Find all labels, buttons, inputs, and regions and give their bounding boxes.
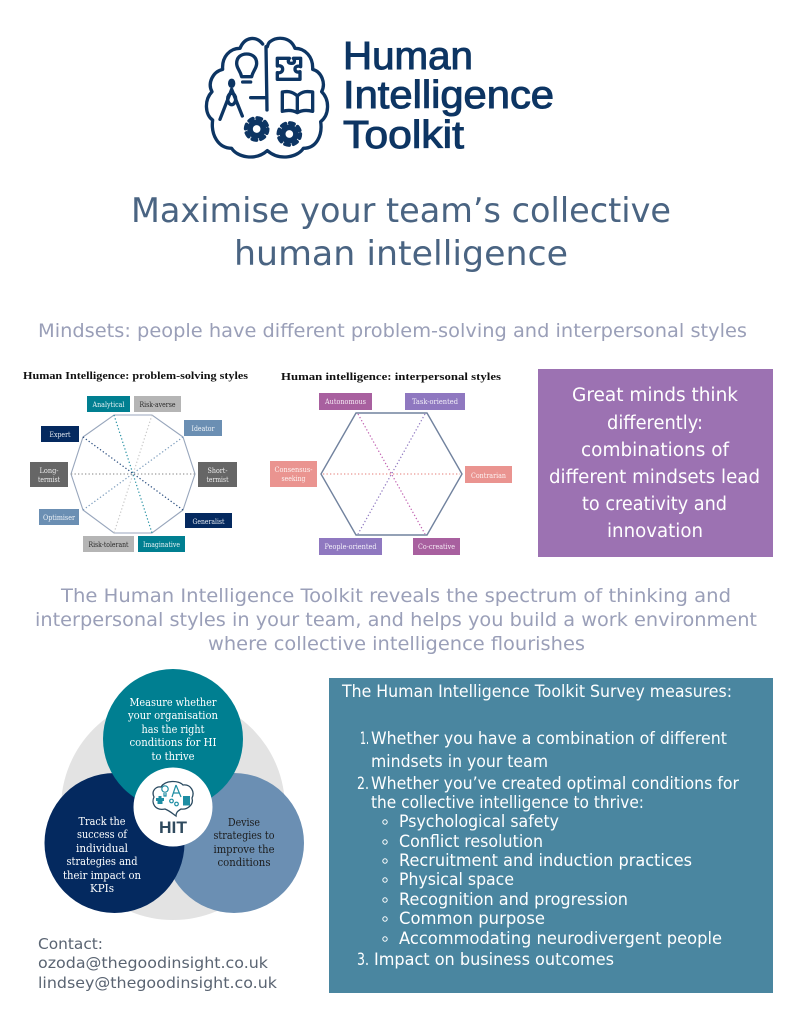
circle: devise strategies — [164, 773, 304, 913]
logo wordmark: Intelligence — [343, 74, 554, 117]
callout: great minds think differently: Great minds think — [572, 385, 738, 406]
label: Short-termist — [198, 462, 237, 487]
label: Risk-tolerant — [83, 536, 134, 552]
label: Consensus-seeking — [270, 461, 317, 487]
numbered list: survey items: the collective intelligence to thrive: — [371, 793, 644, 812]
logo wordmark — [343, 35, 554, 157]
title: Maximise your team’s collective — [131, 191, 671, 231]
numbered list: survey items: 1. — [360, 729, 369, 748]
label: Ideator — [184, 420, 222, 436]
contact details: lindsey@thegoodinsight.co.uk — [38, 974, 277, 992]
label: Autonomous — [319, 393, 372, 410]
panel heading: The Human Intelligence Toolkit Survey measures: — [341, 682, 732, 701]
numbered list: survey items: 2. — [357, 774, 369, 793]
circle: measure conditions: your organisation — [127, 709, 218, 722]
contact details: ozoda@thegoodinsight.co.uk — [38, 954, 268, 972]
label: Analytical — [87, 396, 130, 412]
logo: Human Intelligence Toolkit — [206, 35, 554, 157]
callout: great minds think differently: innovation — [607, 521, 703, 542]
numbered list: survey items — [357, 729, 739, 969]
label: Consensus-seeking: Consensus- — [274, 466, 313, 474]
label: Long-termist — [30, 462, 68, 487]
HIT centre badge: HIT — [159, 818, 188, 837]
label: Autonomous: Autonomous — [324, 398, 366, 406]
label: Co-creative: Co-creative — [418, 543, 455, 551]
circle: track success: success of — [77, 828, 128, 841]
numbered list: survey items: Recruitment and induction practices — [399, 851, 692, 870]
circle: devise strategies: improve the — [214, 843, 274, 856]
numbered list: survey items: Psychological safety — [399, 812, 559, 831]
contact details — [38, 935, 277, 992]
circle: track success: their impact on — [63, 869, 141, 882]
label: Risk-averse — [134, 396, 181, 412]
circle: track success: KPIs — [90, 882, 114, 895]
contact details: Contact: — [38, 935, 103, 953]
callout: great minds think differently — [538, 369, 773, 557]
numbered list: survey items: Physical space — [399, 870, 514, 889]
numbered list: survey items: Impact on business outcomes — [374, 950, 614, 969]
label: People-oriented — [319, 538, 382, 555]
chart: interpersonal styles hexagon — [270, 371, 512, 555]
title: human intelligence — [234, 234, 568, 274]
label: Optimiser: Optimiser — [43, 514, 76, 522]
label: Generalist: Generalist — [192, 518, 225, 526]
label: Short-termist: termist — [206, 476, 229, 484]
circle: measure conditions — [103, 669, 243, 809]
circle: measure conditions: to thrive — [152, 750, 194, 763]
subheading: mindsets: Mindsets: people have different problem-solving and interpersonal styles — [38, 320, 747, 342]
HIT centre badge — [134, 768, 212, 846]
numbered list: survey items: Accommodating neurodivergent people — [399, 929, 722, 948]
circle: devise strategies: Devise — [228, 816, 260, 829]
circle: track success: Track the — [78, 815, 126, 828]
panel: survey measures — [329, 678, 773, 993]
label: Imaginative — [138, 536, 185, 552]
text block: toolkit description: where collective intelligence flourishes — [208, 633, 585, 655]
circle: measure conditions: conditions for HI — [130, 736, 216, 749]
text block: toolkit description: interpersonal styles in your team, and helps you build a work environment — [35, 609, 757, 631]
label: People-oriented: People-oriented — [324, 543, 377, 551]
label: Contrarian — [465, 466, 512, 483]
circle: track success: individual — [76, 842, 129, 855]
label: Generalist — [185, 513, 232, 528]
label: Consensus-seeking: seeking — [282, 475, 306, 483]
circle: devise strategies: conditions — [218, 856, 270, 869]
label: Task-oriented: Task-oriented — [412, 398, 458, 406]
callout: great minds think differently: combinations of — [581, 440, 729, 461]
title — [131, 191, 671, 274]
chart title: interpersonal styles: Human intelligence: interpersonal styles — [281, 371, 502, 383]
chart: problem-solving styles decagon — [23, 370, 249, 552]
numbered list: survey items: 3. — [357, 950, 369, 969]
label: Ideator: Ideator — [192, 425, 215, 433]
chart title: problem-solving styles: Human Intelligence: problem-solving styles — [23, 370, 249, 382]
diagram: HIT cycle circles — [44, 669, 304, 920]
logo wordmark: Toolkit — [343, 114, 464, 157]
text block: toolkit description: The Human Intelligence Toolkit reveals the spectrum of thinking and — [60, 585, 731, 607]
label: Analytical: Analytical — [92, 401, 125, 409]
label: Optimiser — [39, 509, 79, 525]
numbered list: survey items: Conflict resolution — [399, 832, 543, 851]
label: Long-termist: Long- — [40, 467, 59, 475]
label: Co-creative — [413, 538, 460, 555]
circle: track success — [44, 773, 184, 913]
numbered list: survey items: mindsets in your team — [371, 752, 548, 771]
circle: track success: strategies and — [66, 855, 138, 868]
circle: measure conditions: Measure whether — [130, 696, 217, 709]
label: Expert: Expert — [50, 431, 71, 439]
callout: great minds think differently: differently: — [607, 413, 703, 434]
numbered list: survey items: Recognition and progression — [399, 890, 628, 909]
numbered list: survey items: Whether you’ve created optimal conditions for — [371, 774, 739, 793]
circle: measure conditions: has the right — [142, 723, 205, 736]
logo wordmark: Human — [343, 35, 473, 78]
callout: great minds think differently: to creativity and — [582, 494, 727, 515]
callout: great minds think differently: different mindsets lead — [549, 467, 760, 488]
label: Task-oriented — [405, 393, 465, 410]
label: Contrarian: Contrarian — [471, 472, 506, 480]
text block: toolkit description — [35, 585, 757, 655]
circle: devise strategies: strategies to — [214, 829, 274, 842]
icon: brain with tools — [206, 38, 328, 157]
label: Expert — [41, 426, 79, 442]
numbered list: survey items: Common purpose — [399, 909, 545, 928]
label: Short-termist: Short- — [208, 467, 228, 475]
label: Imaginative: Imaginative — [143, 541, 180, 549]
label: Long-termist: termist — [38, 476, 60, 484]
label: Risk-tolerant: Risk-tolerant — [88, 541, 129, 549]
label: Risk-averse: Risk-averse — [140, 401, 176, 409]
numbered list: survey items: Whether you have a combination of different — [371, 729, 728, 748]
